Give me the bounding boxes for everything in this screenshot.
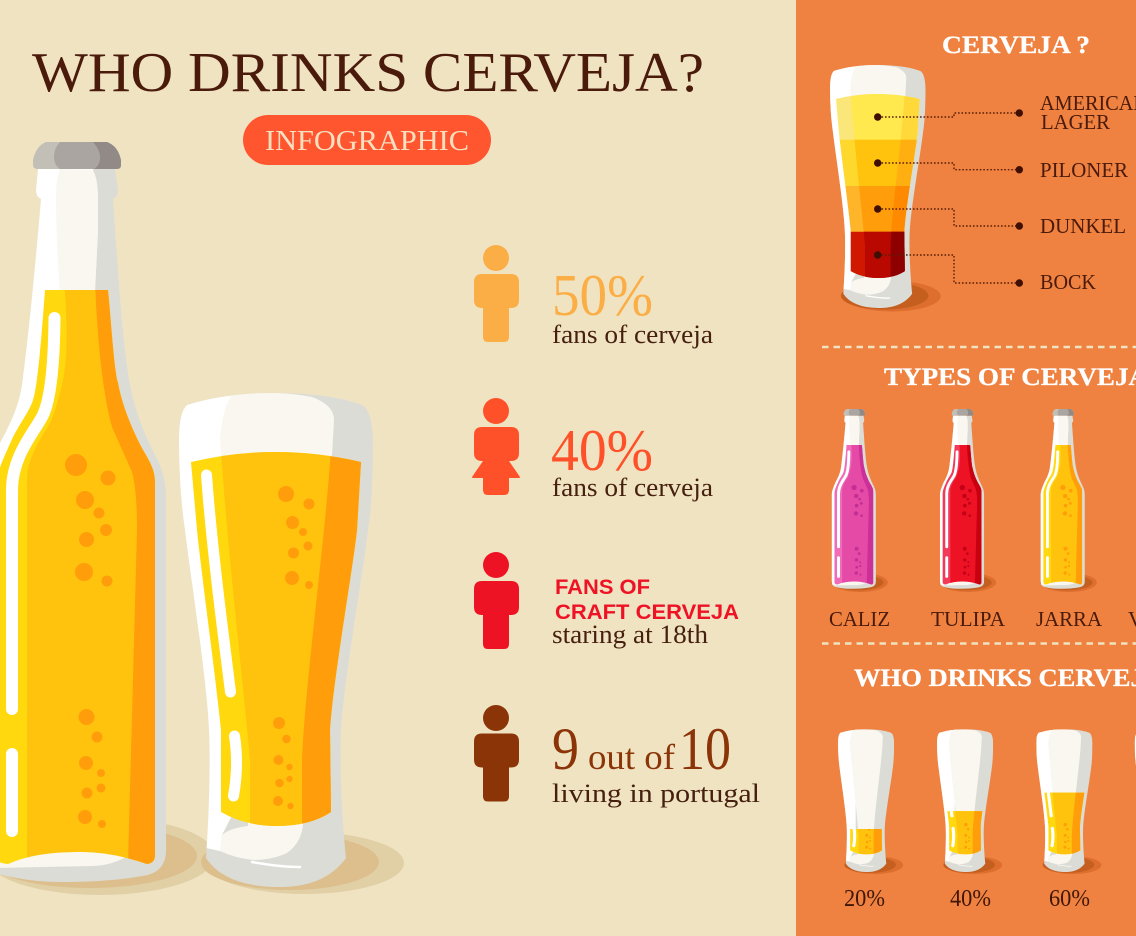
heading: cerveja: CERVEJA ? — [942, 32, 1090, 59]
icon: red figure — [474, 552, 519, 649]
chart: layered beer glass — [826, 61, 941, 312]
stat: 50% fans: fans of cerveja — [552, 320, 713, 349]
badge: infographic: INFOGRAPHIC — [265, 125, 469, 157]
illustration: large beer bottle — [0, 140, 215, 900]
chart item: 40% glass: 40% — [950, 886, 991, 912]
callout: piloner: PILONER — [1040, 158, 1128, 182]
item: jarra bottle — [1036, 409, 1103, 631]
chart item: 60% glass — [1034, 727, 1101, 912]
callout: bock — [874, 251, 1096, 294]
badge: infographic — [243, 115, 491, 165]
callout: dunkel — [874, 205, 1126, 238]
stat: 40% fans: fans of cerveja — [552, 473, 713, 502]
callout: piloner — [874, 158, 1128, 182]
stat: craft cerveja fans: FANS OF — [555, 576, 650, 599]
stat: 40% fans: 40% — [551, 417, 653, 483]
item: tulipa bottle — [931, 409, 1006, 631]
stat: 9 out of 10: 9 — [552, 716, 579, 782]
stat: craft cerveja fans: staring at 18th — [552, 620, 708, 649]
stat: craft cerveja fans: CRAFT CERVEJA — [555, 601, 739, 624]
chart item: 60% glass: 60% — [1049, 886, 1090, 912]
stat: craft cerveja fans — [474, 552, 739, 649]
icon: female figure — [472, 398, 520, 495]
stat: 9 out of 10 — [474, 705, 760, 808]
callout: dunkel: DUNKEL — [1040, 214, 1126, 238]
title: WHO DRINKS CERVEJA? — [32, 42, 704, 104]
callout: american lager: LAGER — [1041, 110, 1110, 134]
panel: orange sidebar — [796, 0, 1136, 936]
item: tulipa bottle: TULIPA — [931, 607, 1006, 631]
chart item: 20% glass: 20% — [844, 886, 885, 912]
stat: 50% fans: 50% — [552, 262, 653, 328]
chart item: 40% glass — [934, 727, 1002, 912]
item: caliz bottle — [828, 409, 890, 631]
stat: 40% fans — [472, 398, 713, 502]
item: jarra bottle: JARRA — [1036, 607, 1103, 631]
heading: types of cerveja: TYPES OF CERVEJA — [884, 364, 1136, 391]
icon: brown figure — [474, 705, 519, 802]
illustration: large beer glass — [170, 385, 404, 895]
chart item: cropped 80% glass — [1134, 734, 1136, 766]
chart item: 20% glass — [835, 727, 903, 912]
stat: 9 out of 10: out of — [588, 737, 675, 777]
stat: 9 out of 10: 10 — [679, 716, 731, 782]
callout: bock: BOCK — [1040, 270, 1096, 294]
icon: male figure orange — [474, 245, 519, 342]
stat: 50% fans — [474, 245, 713, 349]
stat: 9 out of 10: living in portugal — [552, 779, 760, 808]
item: caliz bottle: CALIZ — [829, 607, 890, 631]
callout: american lager — [874, 91, 1136, 134]
